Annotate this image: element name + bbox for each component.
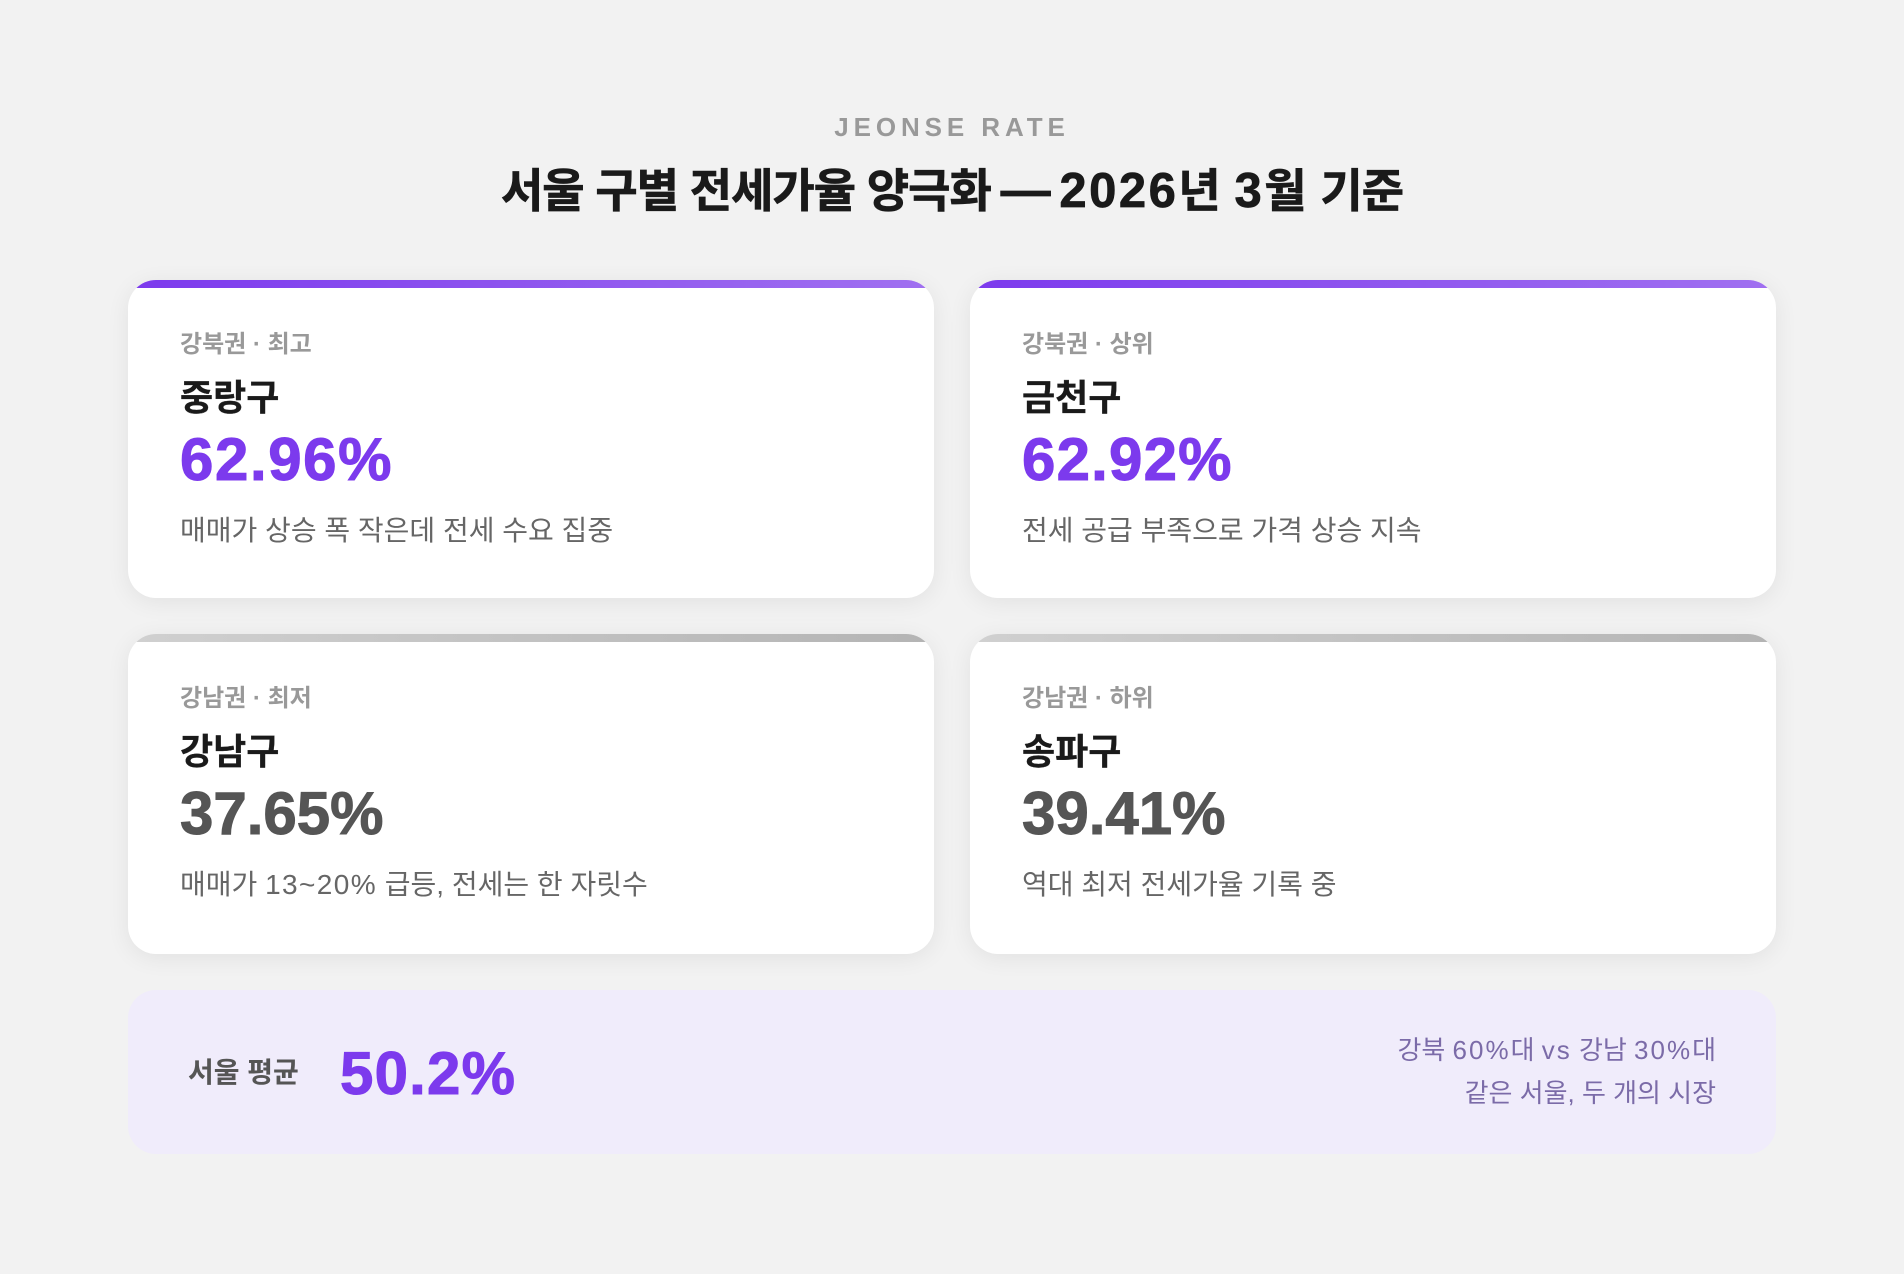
district name: 강남구 bbox=[180, 731, 279, 772]
category label: 강남권 · 최저 bbox=[180, 685, 312, 712]
rate value: 62.92% bbox=[1022, 426, 1233, 493]
panel: 중랑구 bbox=[128, 280, 934, 598]
accent bar bbox=[970, 634, 1776, 642]
title: 서울 구별 전세가율 양극화 — 2026년 3월 기준 bbox=[501, 162, 1403, 218]
description: 전세 공급 부족으로 가격 상승 지속 bbox=[1022, 515, 1422, 546]
panel: 송파구 bbox=[970, 634, 1776, 954]
district name: 송파구 bbox=[1022, 731, 1121, 772]
rate value: 37.65% bbox=[180, 780, 384, 847]
accent bar bbox=[128, 634, 934, 642]
rate value: 62.96% bbox=[180, 426, 393, 493]
average label: 서울 평균 bbox=[188, 1057, 299, 1088]
category label: 강북권 · 최고 bbox=[180, 331, 312, 358]
panel: 강남구 bbox=[128, 634, 934, 954]
description: 매매가 13~20% 급등, 전세는 한 자릿수 bbox=[180, 869, 648, 900]
district name: 중랑구 bbox=[180, 377, 279, 418]
panel: 금천구 bbox=[970, 280, 1776, 598]
average value: 50.2% bbox=[340, 1040, 516, 1107]
category label: 강북권 · 상위 bbox=[1022, 331, 1154, 358]
description: 매매가 상승 폭 작은데 전세 수요 집중 bbox=[180, 515, 613, 546]
eyebrow label: JEONSE RATE bbox=[834, 112, 1070, 142]
accent bar bbox=[128, 280, 934, 288]
comparison note: 같은 서울, 두 개의 시장 bbox=[1465, 1078, 1716, 1108]
rate value: 39.41% bbox=[1022, 780, 1226, 847]
comparison note: 강북 60%대 vs 강남 30%대 bbox=[1397, 1035, 1716, 1065]
description: 역대 최저 전세가율 기록 중 bbox=[1022, 869, 1336, 900]
panel: Seoul average bbox=[128, 990, 1776, 1154]
category label: 강남권 · 하위 bbox=[1022, 685, 1154, 712]
accent bar bbox=[970, 280, 1776, 288]
district name: 금천구 bbox=[1022, 377, 1121, 418]
comparison note bbox=[1397, 1035, 1716, 1108]
